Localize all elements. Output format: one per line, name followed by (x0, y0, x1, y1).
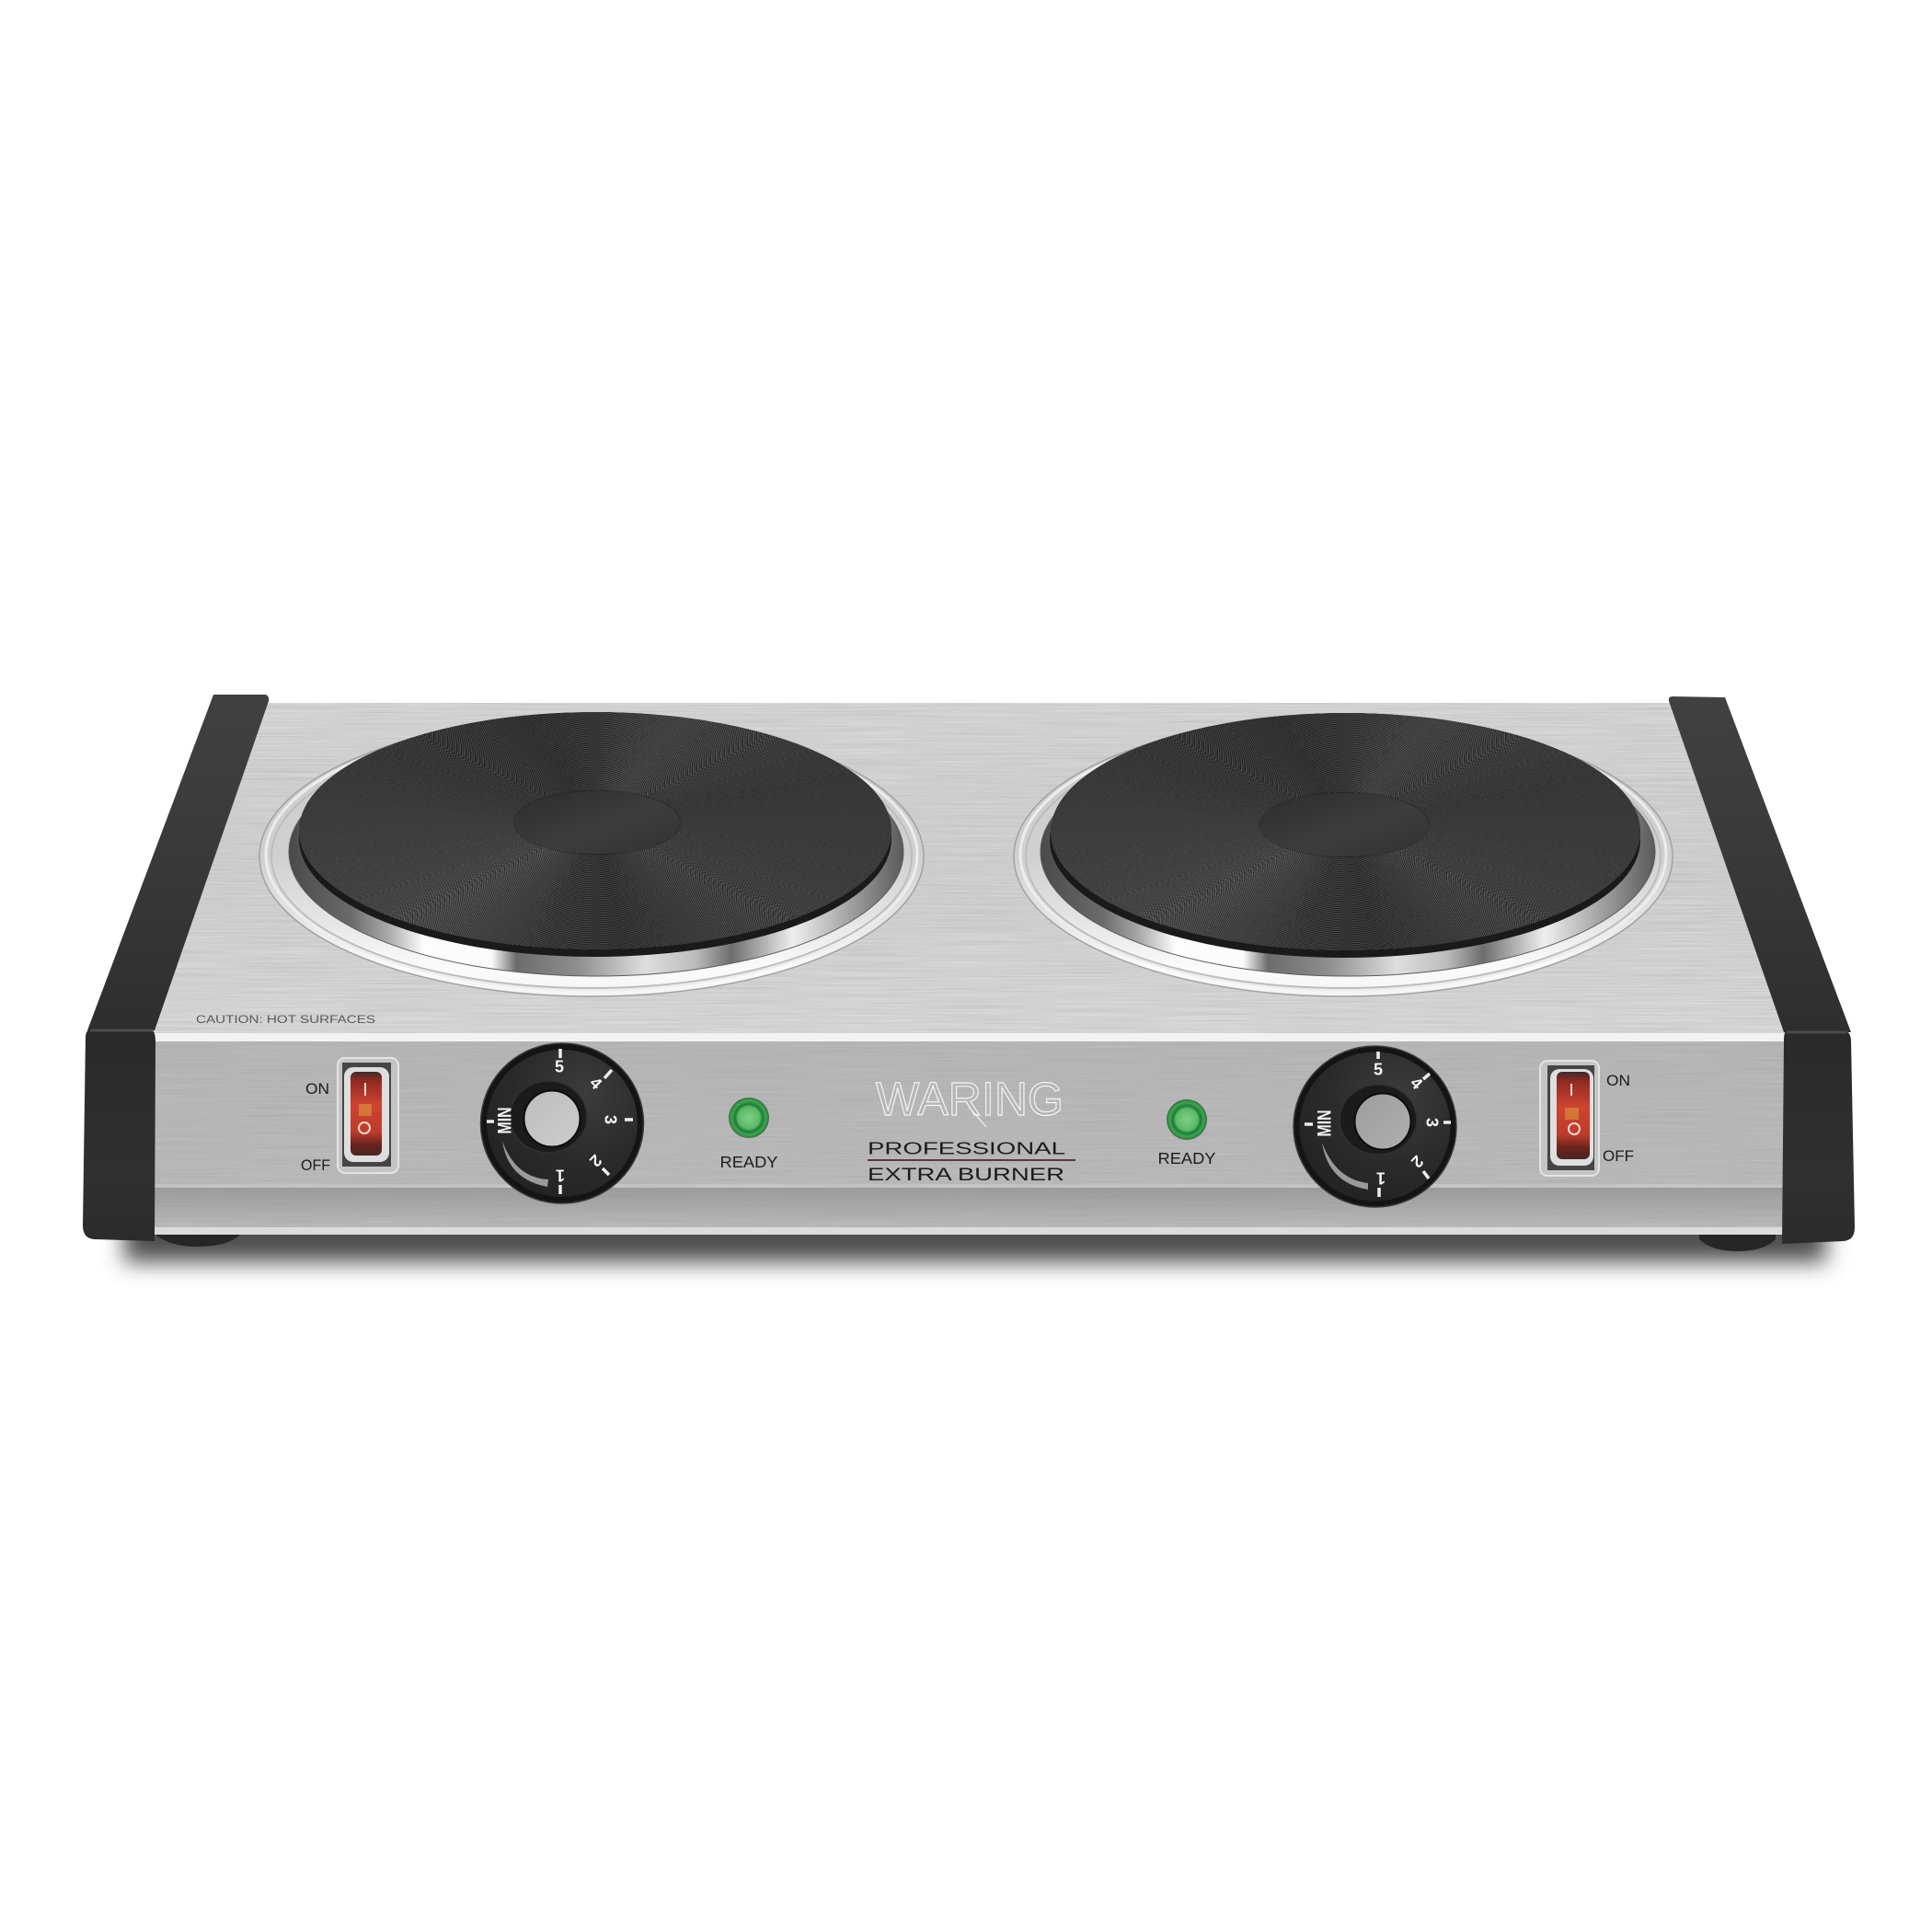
left plate side wall (299, 721, 891, 957)
left red rocker (351, 1072, 382, 1156)
front panel upper face (147, 1041, 1794, 1186)
left switch housing (342, 1063, 391, 1167)
product photo: double electric burner (83, 695, 1855, 1280)
left dial heat arc (502, 1141, 548, 1187)
left dial numbers: 1 (556, 1167, 565, 1185)
left plate grooves (299, 712, 891, 949)
product name line one: PROFESSIONAL (868, 1139, 1065, 1157)
right switch housing (1547, 1065, 1594, 1170)
left black end cap (83, 695, 269, 1241)
left OFF label: OFF (301, 1156, 330, 1174)
front panel lower fold (147, 1188, 1794, 1228)
left plate sheen (299, 712, 891, 949)
right cap rim highlight (1787, 1030, 1847, 1034)
right outer flange (1014, 717, 1673, 996)
left temperature dial (480, 1043, 644, 1203)
left rocker symbols (359, 1083, 372, 1133)
product name line two: EXTRA BURNER (868, 1166, 1064, 1185)
right OFF label: OFF (1603, 1147, 1634, 1165)
left dial collar (510, 1081, 587, 1153)
left dial numbers: 4 (586, 1074, 605, 1093)
right red rocker (1557, 1072, 1590, 1159)
right plate sheen (1051, 713, 1640, 950)
right temperature dial (1294, 1046, 1456, 1207)
right dial face (1299, 1052, 1450, 1202)
left dial opening (524, 1091, 580, 1146)
stainless top surface (147, 703, 1794, 1034)
left ON label: ON (305, 1080, 329, 1098)
right black end cap (1669, 696, 1855, 1244)
left cap top face (87, 695, 269, 1030)
bright strips redrawn over the texture (147, 1033, 1794, 1235)
right dial numbers: 2 (1408, 1152, 1427, 1171)
right plate side wall (1050, 722, 1640, 958)
left dial numbers: 5 (555, 1058, 564, 1076)
left burner plate (299, 712, 891, 949)
right switch bezel (1550, 1069, 1593, 1166)
right ON label: ON (1606, 1072, 1630, 1089)
right dial numbers: 1 (1376, 1168, 1386, 1187)
right dial opening (1354, 1093, 1411, 1150)
fold highlight (147, 1184, 1794, 1188)
right ready light (1167, 1099, 1207, 1140)
right dial rim (1294, 1046, 1456, 1207)
left dial numbers: 3 (602, 1115, 620, 1124)
left centre disc (514, 791, 680, 854)
left outer flange (259, 717, 924, 996)
left foot (156, 1233, 239, 1247)
caution text: CAUTION: HOT SURFACES (196, 1015, 375, 1026)
left dial numbers (495, 1058, 620, 1185)
left cap front face (83, 1029, 155, 1241)
cast shadow under the unit (124, 1205, 1826, 1262)
right centre disc (1260, 793, 1429, 857)
rule between product name lines (868, 1159, 1075, 1161)
left ready light (729, 1098, 769, 1138)
right cap front face (1782, 1030, 1855, 1244)
right dial ticks (1305, 1052, 1451, 1197)
left dial ticks (487, 1049, 633, 1194)
right switch clear cover (1540, 1061, 1599, 1176)
right dial numbers (1314, 1060, 1441, 1187)
left dial rim (480, 1043, 644, 1203)
Waring logo: WARING (876, 1073, 1064, 1125)
right dial collar (1340, 1085, 1417, 1155)
right burner plate (1051, 713, 1640, 950)
left dial face (487, 1050, 638, 1197)
right rocker switch (1540, 1061, 1599, 1176)
right dial numbers: 3 (1422, 1118, 1441, 1127)
right dial numbers: 5 (1374, 1060, 1383, 1078)
right plate grooves (1051, 713, 1640, 950)
appliance body with panel, burner rims and controls (83, 695, 1855, 1280)
right dial heat arc (1322, 1143, 1368, 1190)
right ready label: READY (1157, 1149, 1216, 1167)
right chrome ring (1041, 728, 1655, 976)
left switch bezel (344, 1067, 389, 1162)
right dial numbers: 4 (1407, 1074, 1426, 1093)
right dial numbers: MIN (1314, 1110, 1336, 1136)
left rocker switch (338, 1058, 398, 1173)
right rocker symbols (1565, 1084, 1580, 1134)
right foot (1699, 1233, 1776, 1251)
left switch clear cover (338, 1058, 398, 1173)
brushed steel texture (147, 699, 1794, 1237)
left burner rim (259, 717, 924, 996)
left dial numbers: MIN (495, 1108, 515, 1133)
left chrome ring (289, 728, 903, 976)
left ready label: READY (719, 1153, 778, 1171)
left dial numbers: 2 (586, 1151, 605, 1170)
right cap top face (1669, 696, 1851, 1032)
right burner rim (1014, 717, 1673, 996)
left cap rim highlight (90, 1029, 153, 1032)
